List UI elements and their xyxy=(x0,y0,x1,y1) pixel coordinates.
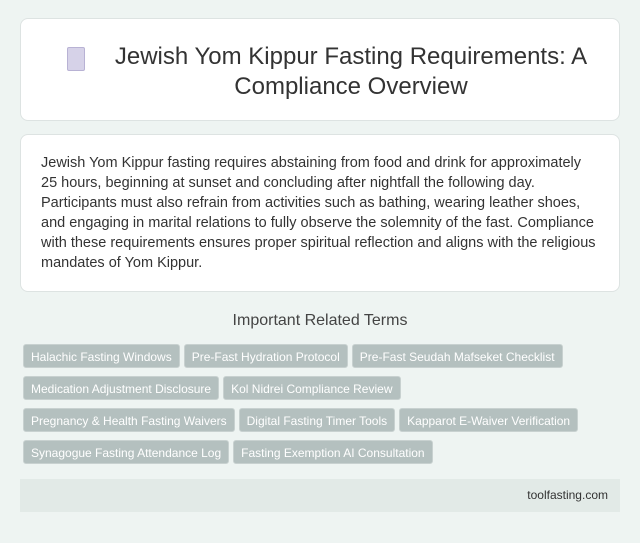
tags: Kol Nidrei Compliance Review xyxy=(231,382,392,396)
tags: Pre-Fast Hydration Protocol xyxy=(192,350,340,364)
terms heading: Important Related Terms xyxy=(233,312,407,329)
icon: scroll xyxy=(67,47,85,71)
tags: Synagogue Fasting Attendance Log xyxy=(31,446,221,460)
tags: Kapparot E-Waiver Verification xyxy=(407,414,570,428)
tags: Fasting Exemption AI Consultation xyxy=(241,446,425,460)
description panel xyxy=(20,134,620,292)
description text: Jewish Yom Kippur fasting requires abstaining from food and drink for approximately 25 hours, beginning at sunset and concluding after nightfall the following day. Participants must also refrain from activities such as bathing, wearing leather shoes, and engaging in marital relations to fully observe the solemnity of the fast. Compliance with these requirements ensures proper spiritual reflection and aligns with the religious mandates of Yom Kippur. xyxy=(41,155,596,271)
tags: Pre-Fast Seudah Mafseket Checklist xyxy=(360,350,555,364)
tags xyxy=(23,344,578,464)
tags: Digital Fasting Timer Tools xyxy=(247,414,387,428)
tags: Pregnancy & Health Fasting Waivers xyxy=(31,414,227,428)
footer: toolfasting.com xyxy=(527,488,608,502)
header panel xyxy=(20,18,620,121)
tags: Halachic Fasting Windows xyxy=(31,350,172,364)
title: Jewish Yom Kippur Fasting Requirements: A Compliance Overview xyxy=(115,43,587,100)
footer xyxy=(20,479,620,512)
tags: Medication Adjustment Disclosure xyxy=(31,382,211,396)
